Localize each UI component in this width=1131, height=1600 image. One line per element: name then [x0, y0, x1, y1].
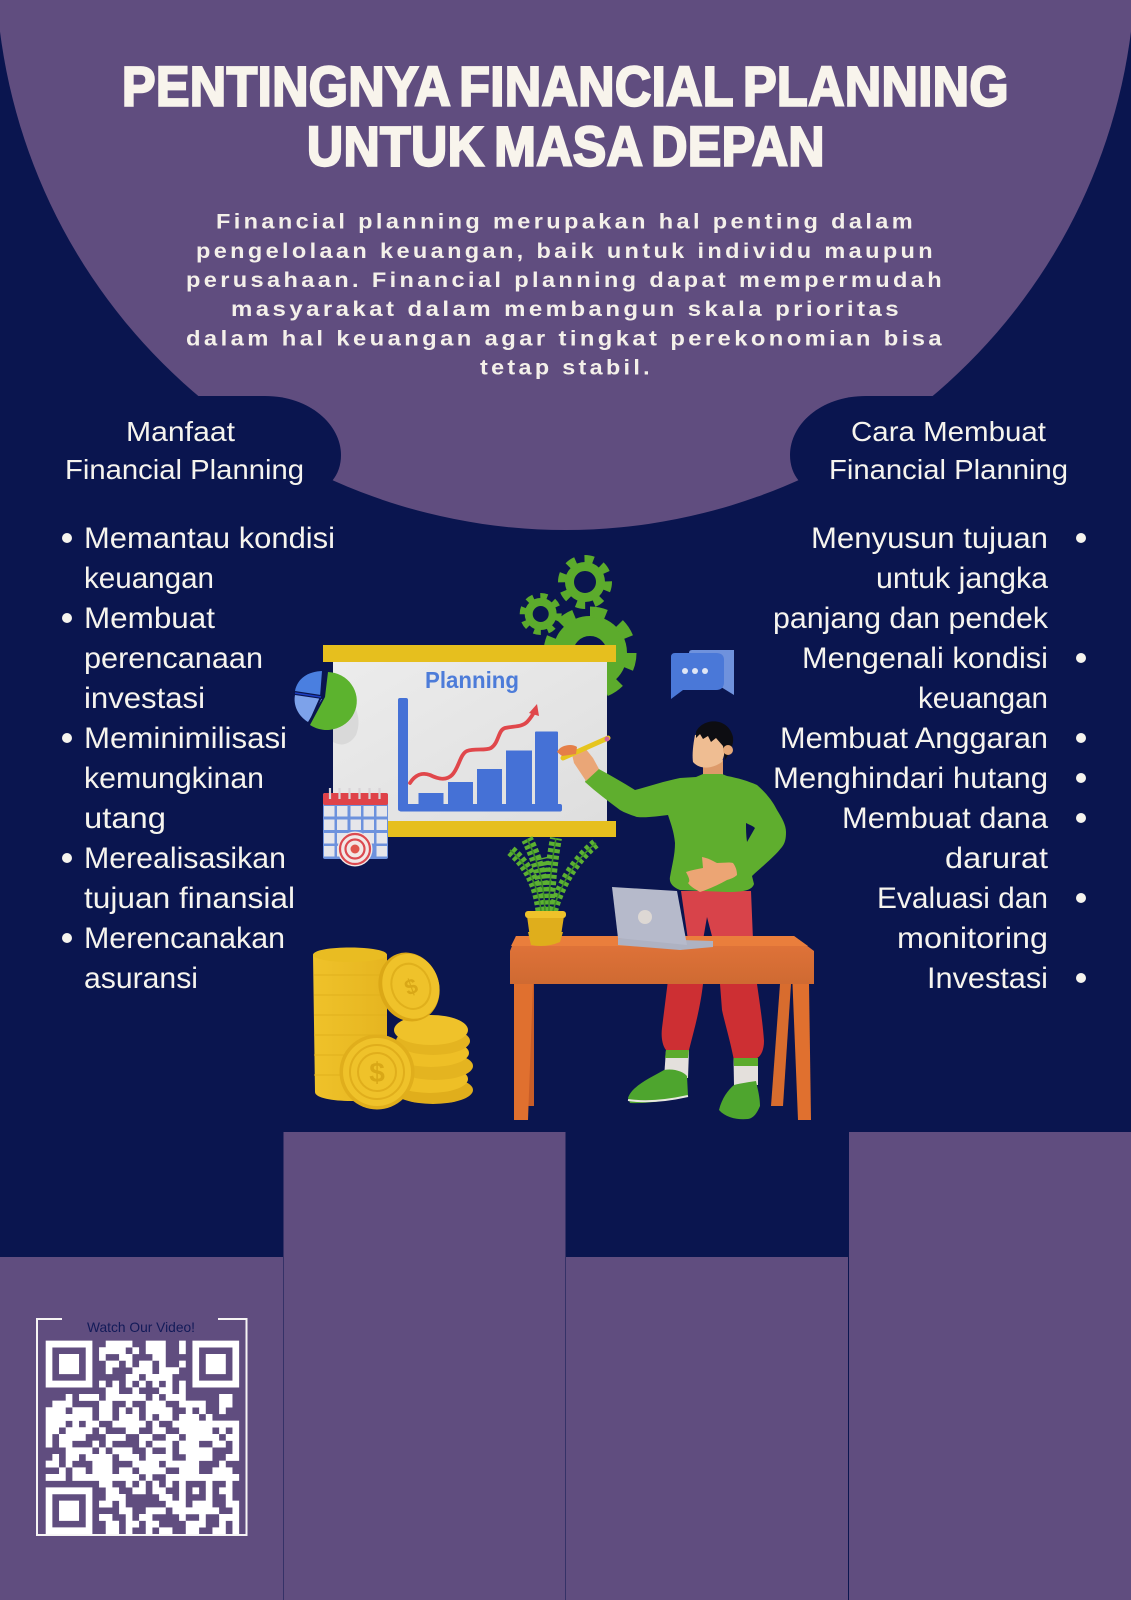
- heading: manfaat: Financial Planning: [65, 454, 304, 485]
- list: manfaat: keuangan: [84, 562, 214, 595]
- title: PENTINGNYA FINANCIAL PLANNING: [122, 54, 1009, 118]
- list: manfaat: [62, 522, 335, 995]
- list: manfaat: perencanaan: [84, 642, 263, 675]
- front coin: $: [369, 1057, 385, 1088]
- list: cara membuat: Menghindari hutang: [773, 762, 1048, 795]
- table: [510, 936, 814, 1120]
- tilted coin: $: [401, 973, 421, 1001]
- intro paragraph: tetap stabil.: [480, 356, 653, 380]
- list: cara membuat: monitoring: [897, 922, 1048, 955]
- title: [122, 54, 1009, 178]
- list: manfaat: investasi: [84, 682, 205, 715]
- intro paragraph: dalam hal keuangan agar tingkat perekonomian bisa: [186, 328, 945, 350]
- qr code with frame: [37, 1319, 246, 1535]
- heading: manfaat: Manfaat: [126, 416, 235, 447]
- icon: calendar with target: [323, 788, 388, 866]
- header: purple circle: [0, 0, 1131, 530]
- heading: cara membuat: Cara Membuat: [851, 416, 1046, 447]
- title: UNTUK MASA DEPAN: [307, 114, 825, 178]
- board title: Planning: [425, 667, 519, 693]
- list: cara membuat: untuk jangka: [876, 562, 1048, 595]
- green sweater: [585, 768, 786, 892]
- icon: gears: [523, 559, 631, 694]
- presentation board: [323, 645, 616, 837]
- bottom panels: [0, 1132, 1131, 1600]
- qr label: Watch Our Video!: [87, 1319, 195, 1335]
- list: cara membuat: [773, 522, 1086, 995]
- upper trousers: [681, 891, 753, 940]
- list: cara membuat: Mengenali kondisi: [802, 642, 1048, 675]
- list: manfaat: Membuat: [84, 602, 216, 635]
- list: cara membuat: Investasi: [927, 962, 1048, 995]
- red trend arrow: [410, 704, 539, 783]
- list: manfaat: Merealisasikan: [84, 842, 286, 875]
- intro paragraph: masyarakat dalam membangun skala prioritas: [231, 298, 902, 321]
- frame: [37, 1319, 246, 1535]
- tilted coin: [369, 944, 449, 1030]
- list: cara membuat: Menyusun tujuan: [811, 522, 1048, 555]
- hands and pencil: [557, 736, 737, 892]
- list: cara membuat: keuangan: [918, 682, 1048, 715]
- list: cara membuat: Membuat dana: [842, 802, 1048, 835]
- list: cara membuat: Membuat Anggaran: [780, 722, 1048, 755]
- icon: chat bubble: [671, 650, 734, 699]
- list: manfaat: Merencanakan: [84, 922, 285, 955]
- person: [557, 721, 786, 1119]
- intro paragraph: Financial planning merupakan hal penting dalam: [216, 210, 916, 234]
- list: cara membuat: Evaluasi dan: [877, 882, 1048, 915]
- list: cara membuat: panjang dan pendek: [773, 602, 1049, 635]
- neck and head: [693, 721, 733, 778]
- list: cara membuat: darurat: [945, 842, 1049, 875]
- laptop: [612, 887, 713, 950]
- list: manfaat: asuransi: [84, 962, 198, 995]
- intro paragraph: [186, 210, 945, 380]
- short coin stack: [392, 1015, 473, 1104]
- socks: [664, 1050, 689, 1078]
- pot base over table: [528, 932, 563, 946]
- legs: [662, 984, 703, 1052]
- list: manfaat: Memantau kondisi: [84, 522, 335, 555]
- coins: [313, 944, 473, 1110]
- heading: cara membuat: [829, 416, 1068, 485]
- icon: pie chart: [295, 671, 357, 730]
- bar chart: [398, 698, 562, 812]
- qr modules: [46, 1344, 239, 1531]
- list: manfaat: utang: [84, 802, 166, 835]
- heading: cara membuat: Financial Planning: [829, 454, 1068, 485]
- heading: manfaat: [65, 416, 304, 485]
- intro paragraph: pengelolaan keuangan, baik untuk individu maupun: [196, 240, 936, 263]
- shoes: [628, 1069, 760, 1119]
- list: manfaat: tujuan finansial: [84, 882, 295, 915]
- list: manfaat: Meminimilisasi: [84, 722, 287, 755]
- intro paragraph: perusahaan. Financial planning dapat mempermudah: [186, 269, 945, 292]
- list: manfaat: kemungkinan: [84, 762, 264, 795]
- tall coin stack: [313, 948, 387, 1101]
- front coin: [340, 1034, 414, 1110]
- plant in pot: [510, 838, 596, 946]
